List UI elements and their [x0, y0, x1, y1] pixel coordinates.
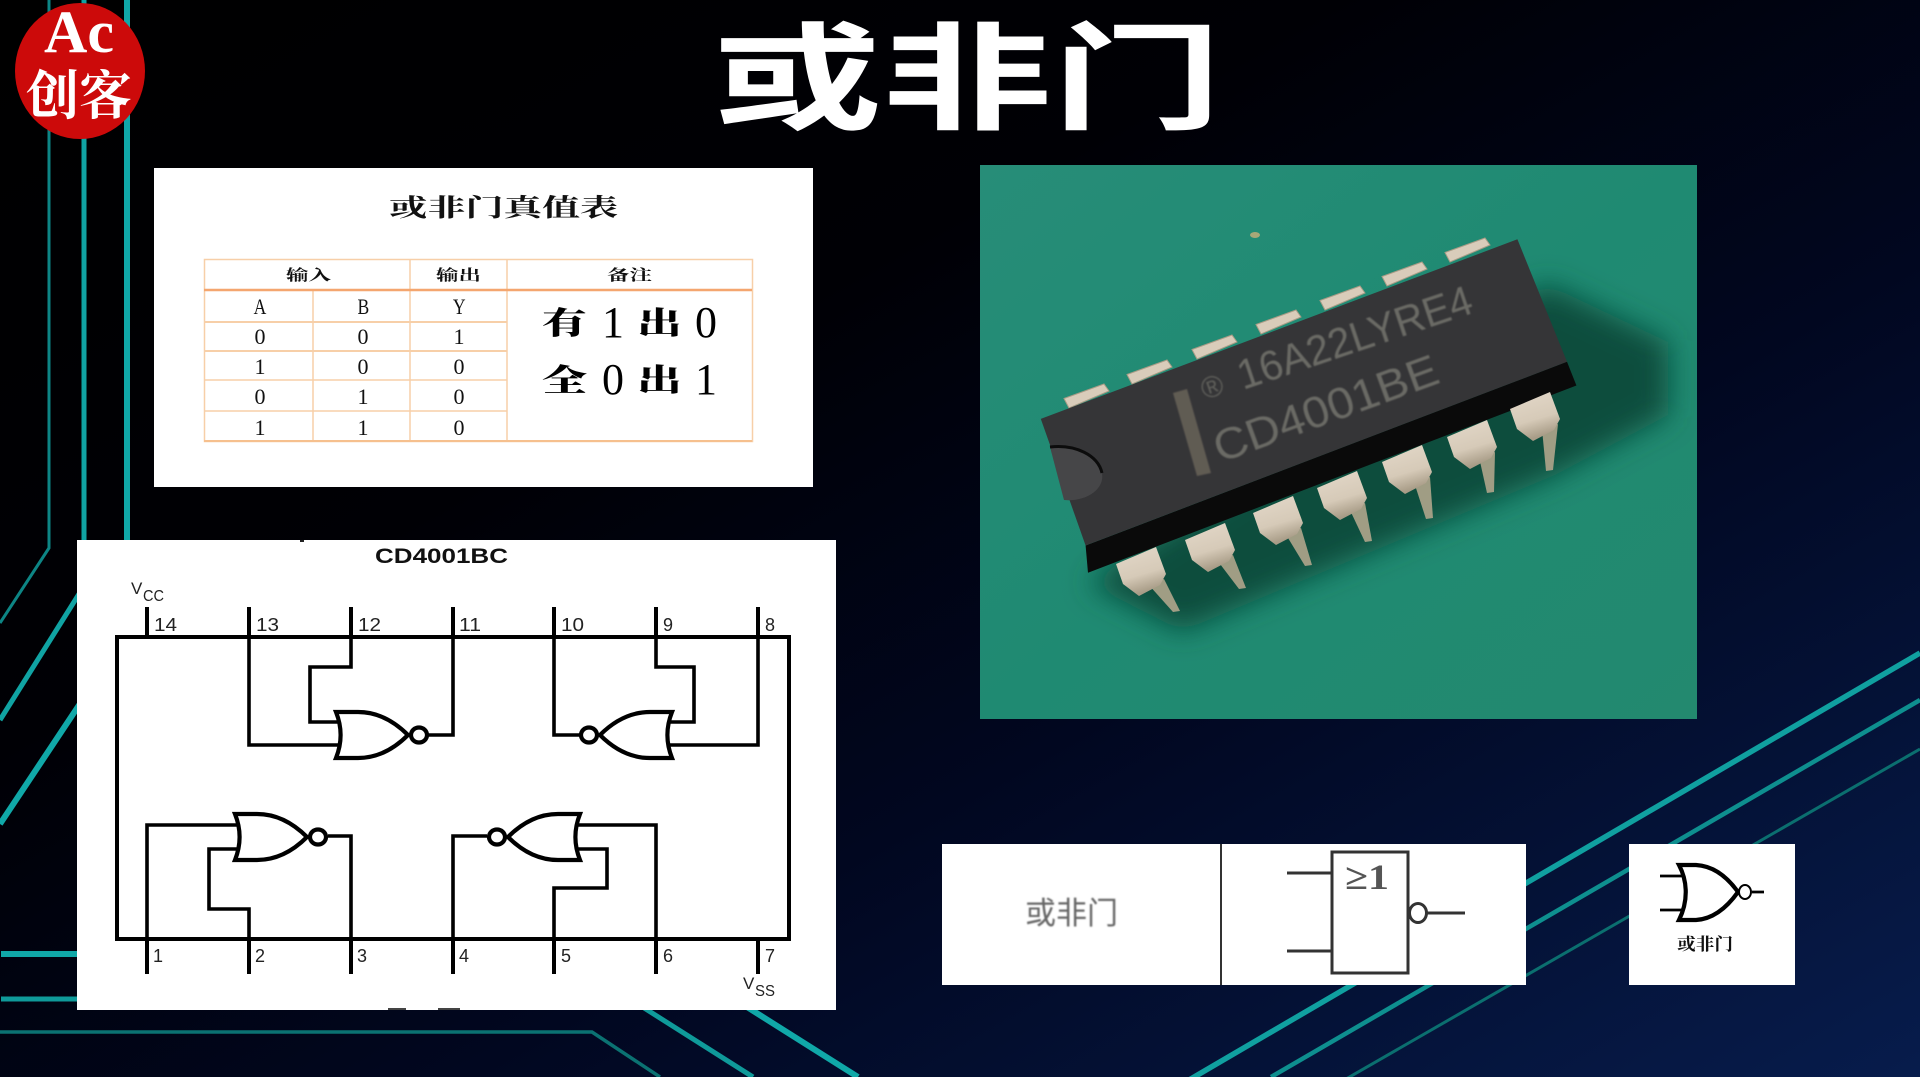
pin numbers: 3	[357, 946, 367, 966]
panel: truth table	[154, 168, 813, 487]
chip shadow	[1088, 284, 1668, 631]
memo rules: 有	[542, 299, 587, 344]
table header row: 输入	[286, 264, 331, 285]
VCC label: V	[131, 579, 143, 598]
circuit traces: left and bottom	[0, 0, 858, 1077]
VSS label: V	[743, 974, 755, 993]
gate caption: 或非门	[1677, 930, 1733, 955]
gate: pins 11-13	[336, 712, 427, 758]
lower pins	[1116, 392, 1560, 612]
table values: 1	[254, 415, 266, 440]
panel: NOR gate symbol	[1629, 844, 1795, 985]
panel: IEC NOR symbol table	[942, 844, 1526, 985]
table header row: 输出	[436, 264, 481, 285]
memo rules: 1	[695, 355, 717, 404]
table values: 0	[454, 415, 464, 440]
pin numbers: 12	[358, 615, 381, 635]
memo rules: 出	[637, 299, 682, 344]
circuit traces: lower right diagonals	[1189, 653, 1920, 1077]
pin numbers: 6	[663, 946, 673, 966]
memo rules: 1	[602, 298, 624, 347]
IEC NOR symbol: ≥1	[1345, 857, 1389, 897]
table values: Y	[453, 295, 466, 320]
pin numbers: 5	[561, 946, 571, 966]
table heading: 或非门真值表	[389, 189, 618, 224]
chip marking: 16A22LYRE4	[1231, 276, 1478, 399]
wiring	[147, 637, 758, 939]
memo rules: 0	[695, 298, 717, 347]
VCC label	[131, 579, 164, 605]
upper pin tabs	[1064, 238, 1490, 408]
memo rules: 出	[637, 356, 682, 401]
table values: 0	[254, 324, 266, 349]
chip marking	[1197, 276, 1478, 472]
table values: 0	[358, 354, 368, 379]
gate: pins 8-10	[581, 712, 672, 758]
table values: 0	[454, 384, 464, 409]
memo rules: 全	[542, 356, 587, 401]
chip body	[1086, 362, 1576, 573]
gate: pins 1-3	[235, 814, 326, 860]
chip marking: CD4001BE	[1207, 346, 1445, 472]
pin numbers: 7	[765, 946, 775, 966]
pin numbers: 10	[561, 615, 584, 635]
panel: CD4001BC pinout schematic	[77, 540, 836, 1010]
table values: A	[254, 295, 267, 320]
memo rules	[542, 298, 717, 404]
table values: 1	[358, 384, 368, 409]
pin numbers: 2	[255, 946, 265, 966]
orientation stripe	[1173, 389, 1211, 476]
symbol name: 或非门	[1025, 888, 1118, 933]
logo badge	[15, 0, 145, 139]
pin numbers: 4	[459, 946, 469, 966]
table grid	[204, 259, 752, 442]
logo badge: Ac	[44, 0, 114, 65]
table values	[254, 295, 466, 440]
logo badge: 创客	[26, 54, 132, 130]
VCC label: CC	[143, 588, 164, 605]
table values: 1	[454, 324, 464, 349]
VSS label	[743, 974, 775, 1000]
pin numbers: 9	[663, 615, 673, 635]
chip marking: ®	[1197, 368, 1228, 407]
table values: 0	[358, 324, 368, 349]
table values: 1	[254, 354, 266, 379]
VSS label: SS	[755, 983, 775, 1000]
table values: B	[358, 295, 369, 320]
pin numbers: 8	[765, 615, 775, 635]
pin numbers: 14	[154, 615, 177, 635]
notch	[1050, 447, 1102, 500]
memo rules: 0	[602, 355, 624, 404]
pin numbers: 1	[153, 946, 163, 966]
table values: 1	[358, 415, 368, 440]
table values: 0	[454, 354, 464, 379]
IEC NOR symbol	[1287, 852, 1465, 973]
gate: pins 4-6	[489, 814, 580, 860]
table header row	[286, 264, 652, 285]
package outline and pins	[117, 607, 789, 974]
panel: photo of CD4001BE chip	[980, 165, 1697, 719]
pin numbers	[153, 615, 775, 966]
table values: 0	[254, 384, 266, 409]
NOR gate icon	[1660, 865, 1764, 920]
chip name: CD4001BC	[375, 545, 508, 568]
pin numbers: 13	[256, 615, 279, 635]
table header row: 备注	[607, 264, 652, 285]
pin numbers: 11	[459, 615, 481, 635]
